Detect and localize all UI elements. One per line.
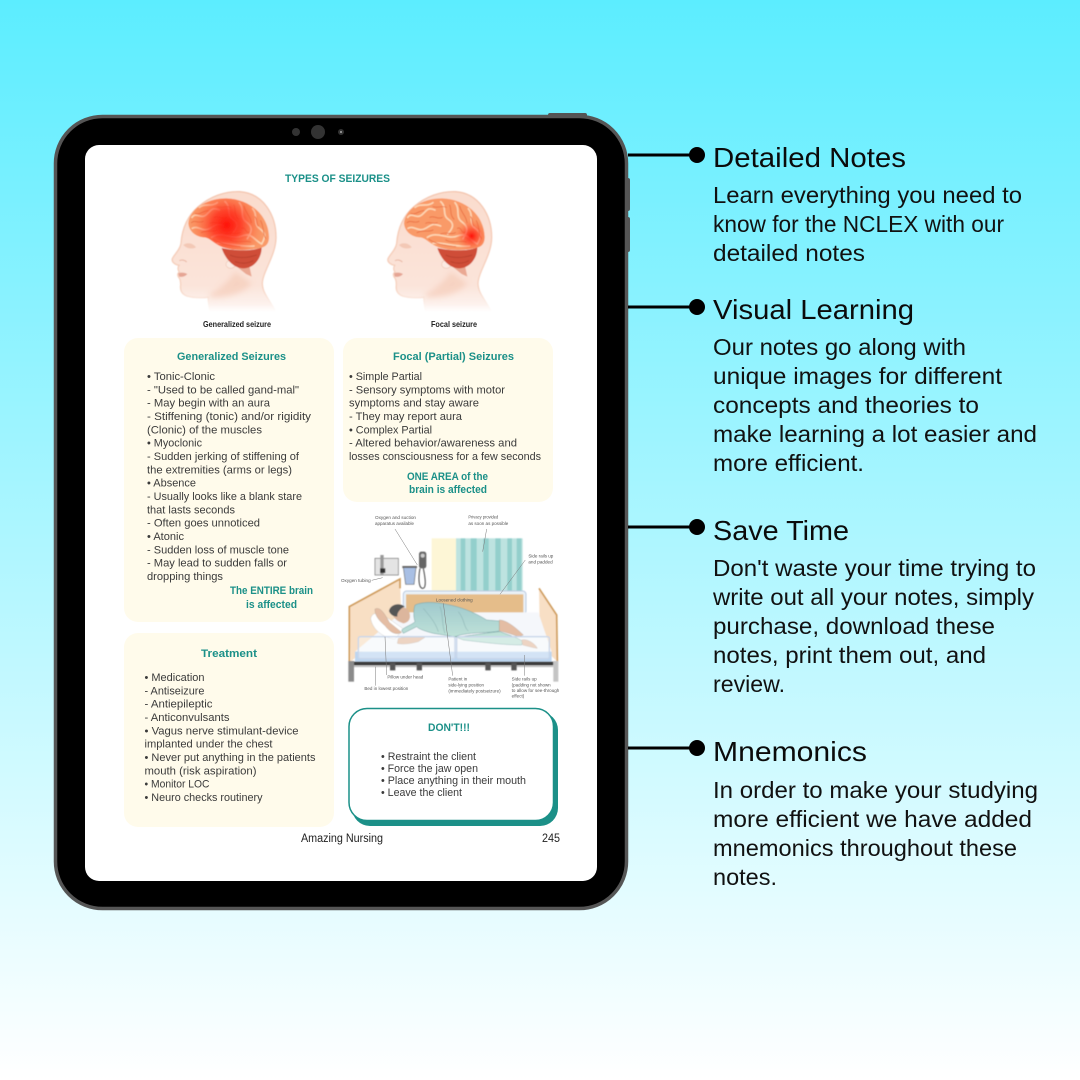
tablet device bbox=[56, 113, 630, 908]
list: treatment items: - Antiseizure bbox=[144, 685, 204, 697]
footer: brand name: Amazing Nursing bbox=[301, 833, 383, 845]
connector: save time bbox=[628, 519, 705, 535]
list: generalized seizure types: that lasts seconds bbox=[147, 504, 235, 516]
callout: one area affected: brain is affected bbox=[409, 484, 487, 496]
list: generalized seizure types: - Often goes unnoticed bbox=[147, 518, 260, 530]
labels: illustration annotations: Side rails up bbox=[512, 676, 537, 682]
panel: generalized seizures bbox=[124, 338, 334, 622]
callout: detailed notes bbox=[628, 142, 1022, 266]
text: visual learning description bbox=[713, 334, 1037, 476]
list: generalized seizure types: • Myoclonic bbox=[147, 438, 202, 450]
list: focal seizure types: - They may report aura bbox=[349, 411, 463, 423]
list: generalized seizure types: - May begin with an aura bbox=[147, 398, 271, 410]
text: visual learning description: more efficient. bbox=[713, 450, 864, 476]
text: save time description: Don't waste your time trying to bbox=[713, 555, 1036, 581]
text: visual learning description: concepts and theories to bbox=[713, 392, 979, 418]
callout: entire brain affected: is affected bbox=[246, 599, 297, 611]
heading: generalized seizures: Generalized Seizures bbox=[177, 351, 286, 363]
text: visual learning description: Our notes go along with bbox=[713, 334, 966, 360]
text: save time description: review. bbox=[713, 671, 785, 697]
list: generalized seizure types: the extremities (arms or legs) bbox=[147, 464, 292, 476]
text: mnemonics description bbox=[713, 777, 1038, 890]
patient head bbox=[392, 606, 410, 623]
connector: mnemonics bbox=[628, 740, 705, 756]
text: mnemonics description: more efficient we have added bbox=[713, 806, 1032, 832]
labels: illustration annotations: Privacy provided bbox=[468, 515, 499, 521]
title: types of seizures: TYPES OF SEIZURES bbox=[285, 173, 390, 185]
list: generalized seizure types: • Atonic bbox=[147, 531, 184, 543]
list: treatment items bbox=[144, 672, 316, 804]
list: focal seizure types bbox=[349, 371, 541, 463]
list: generalized seizure types: (Clonic) of the muscles bbox=[147, 424, 263, 436]
list: treatment items: mouth (risk aspiration) bbox=[144, 765, 256, 777]
heading: detailed notes: Detailed Notes bbox=[713, 142, 906, 173]
labels: illustration annotations: Loosened clothing bbox=[436, 598, 473, 604]
heading: save time: Save Time bbox=[713, 515, 849, 546]
labels: illustration annotations: side-lying position bbox=[448, 682, 484, 688]
list: focal seizure types: • Simple Partial bbox=[349, 371, 422, 383]
heading: focal partial seizures: Focal (Partial) Seizures bbox=[393, 351, 514, 363]
text: mnemonics description: In order to make your studying bbox=[713, 777, 1038, 803]
list: treatment items: - Anticonvulsants bbox=[144, 712, 230, 724]
list: generalized seizure types: • Tonic-Clonic bbox=[147, 371, 216, 383]
labels: illustration annotations: effect) bbox=[512, 694, 525, 700]
panel: treatment bbox=[124, 633, 334, 827]
labels: illustration annotations: Patient in bbox=[448, 676, 468, 682]
list: treatment items: • Neuro checks routinery bbox=[144, 792, 263, 804]
list: don't items: • Place anything in their mouth bbox=[381, 775, 526, 787]
text: save time description: purchase, download these bbox=[713, 613, 995, 639]
leader lines bbox=[372, 529, 525, 686]
list: focal seizure types: symptoms and stay aware bbox=[349, 398, 479, 410]
caption: generalized seizure: Generalized seizure bbox=[203, 319, 271, 329]
labels: illustration annotations: and padded bbox=[528, 560, 553, 566]
heading: mnemonics: Mnemonics bbox=[713, 736, 867, 767]
callout: one area affected: ONE AREA of the bbox=[407, 471, 488, 483]
list: focal seizure types: - Altered behavior/awareness and bbox=[349, 438, 517, 450]
brain illustration: generalized seizure bbox=[172, 192, 276, 312]
list: generalized seizure types bbox=[147, 371, 312, 583]
text: detailed notes description: know for the NCLEX with our bbox=[713, 211, 1004, 237]
callout: visual learning bbox=[628, 294, 1037, 476]
list: don't items bbox=[381, 751, 526, 799]
text: save time description: notes, print them out, and bbox=[713, 642, 986, 668]
text: mnemonics description: notes. bbox=[713, 864, 777, 890]
list: generalized seizure types: - Sudden jerking of stiffening of bbox=[147, 451, 300, 463]
text: detailed notes description bbox=[713, 182, 1022, 266]
list: focal seizure types: - Sensory symptoms with motor bbox=[349, 384, 505, 396]
labels: illustration annotations: to allow for see-through bbox=[512, 688, 560, 694]
list: generalized seizure types: - Stiffening (tonic) and/or rigidity bbox=[147, 411, 312, 423]
list: treatment items: • Vagus nerve stimulant-device bbox=[144, 725, 298, 737]
heading: treatment: Treatment bbox=[201, 648, 257, 660]
callout: one area affected bbox=[407, 471, 488, 496]
heading: visual learning: Visual Learning bbox=[713, 294, 914, 325]
panel: focal seizures bbox=[343, 338, 553, 502]
brain illustration: focal seizure bbox=[388, 192, 492, 312]
connector: visual learning bbox=[628, 299, 705, 315]
list: treatment items: - Antiepileptic bbox=[144, 699, 213, 711]
text: visual learning description: make learning a lot easier and bbox=[713, 421, 1037, 447]
labels: illustration annotations: (padding not shown bbox=[512, 682, 551, 688]
labels: illustration annotations: Pillow under head bbox=[387, 675, 424, 681]
list: treatment items: implanted under the chest bbox=[144, 739, 272, 751]
list: generalized seizure types: • Absence bbox=[147, 478, 196, 490]
list: don't items: • Leave the client bbox=[381, 787, 462, 799]
list: generalized seizure types: - Usually looks like a blank stare bbox=[147, 491, 302, 503]
text: mnemonics description: mnemonics throughout these bbox=[713, 835, 1017, 861]
list: focal seizure types: • Complex Partial bbox=[349, 424, 432, 436]
text: save time description: write out all your notes, simply bbox=[712, 584, 1035, 610]
labels: illustration annotations: (immediately postseizure) bbox=[448, 688, 501, 694]
panel: don't bbox=[349, 708, 558, 826]
labels: illustration annotations: Side rails up bbox=[528, 553, 554, 559]
connector: detailed notes bbox=[628, 147, 705, 163]
callout: mnemonics bbox=[628, 736, 1038, 890]
labels: illustration annotations: Oxygen tubing bbox=[341, 578, 371, 584]
labels: illustration annotations: as soon as possible bbox=[468, 521, 509, 527]
callout: entire brain affected: The ENTIRE brain bbox=[230, 585, 313, 597]
list: focal seizure types: losses consciousness for a few seconds bbox=[349, 451, 541, 463]
list: treatment items: • Never put anything in the patients bbox=[144, 752, 316, 764]
heading: don't: DON'T!!! bbox=[428, 722, 470, 734]
labels: illustration annotations: Bed in lowest position bbox=[364, 686, 409, 692]
illustration: patient positioned on bed during seizure bbox=[341, 515, 560, 700]
labels: illustration annotations: Oxygen and suction bbox=[375, 515, 416, 521]
caption: focal seizure: Focal seizure bbox=[431, 319, 477, 329]
list: generalized seizure types: - "Used to be called gand-mal" bbox=[147, 384, 299, 396]
text: save time description bbox=[712, 555, 1036, 697]
labels: illustration annotations bbox=[341, 515, 560, 700]
pillow bbox=[371, 613, 403, 639]
list: don't items: • Restraint the client bbox=[381, 751, 476, 763]
list: treatment items: • Monitor LOC bbox=[144, 779, 210, 791]
list: treatment items: • Medication bbox=[144, 672, 204, 684]
text: detailed notes description: Learn everything you need to bbox=[713, 182, 1022, 208]
list: don't items: • Force the jaw open bbox=[381, 763, 478, 775]
footer: page number: 245 bbox=[542, 833, 560, 845]
list: generalized seizure types: - Sudden loss of muscle tone bbox=[147, 544, 289, 556]
callout: entire brain affected bbox=[230, 585, 313, 611]
text: visual learning description: unique images for different bbox=[713, 363, 1003, 389]
list: generalized seizure types: - May lead to sudden falls or bbox=[147, 558, 287, 570]
callout: save time bbox=[628, 515, 1036, 697]
text: detailed notes description: detailed notes bbox=[713, 240, 865, 266]
patient gown bbox=[402, 602, 499, 637]
list: generalized seizure types: dropping things bbox=[147, 571, 223, 583]
labels: illustration annotations: apparatus available bbox=[375, 521, 414, 527]
